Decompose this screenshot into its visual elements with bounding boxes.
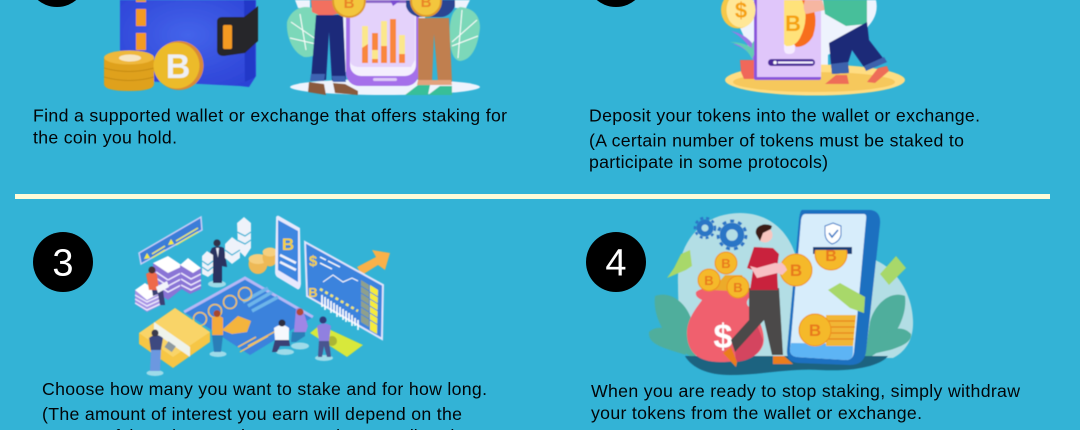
text: step 2 description xyxy=(589,106,980,172)
icon: person withdrawing coins from phone: B xyxy=(790,261,802,280)
number badge 1 xyxy=(27,0,87,7)
icon: isometric crypto data scene: $ xyxy=(309,253,318,270)
text: step 2 description: Deposit your tokens into the wallet or exchange. xyxy=(589,106,980,126)
text: step 4 description: your tokens from the wallet or exchange. xyxy=(591,403,922,423)
text: step 3 description xyxy=(42,379,487,430)
number badge 3 xyxy=(33,232,93,292)
text: step 1 description: the coin you hold. xyxy=(33,128,177,148)
text: step 1 description: Find a supported wallet or exchange that offers staking for xyxy=(33,106,507,126)
number 3: 3 xyxy=(52,242,74,284)
icon: two people holding coins beside phone xyxy=(287,0,480,95)
icon: isometric crypto data scene xyxy=(135,216,390,376)
icon: wallet with coins: B xyxy=(166,48,190,86)
icon: person withdrawing coins from phone: B xyxy=(809,321,821,340)
text: step 3 description: Choose how many you want to stake and for how long. xyxy=(42,379,487,399)
icon: person withdrawing coins from phone: B xyxy=(733,280,743,295)
number badge 2 xyxy=(586,0,646,7)
panel: step 4 xyxy=(586,210,1020,423)
icon: isometric crypto data scene: B xyxy=(308,285,318,300)
text: step 4 description: When you are ready to stop staking, simply withdraw xyxy=(591,381,1020,401)
divider xyxy=(15,194,1050,199)
number 4: 4 xyxy=(605,242,627,284)
text: step 2 description: (A certain number of tokens must be staked to xyxy=(589,130,964,150)
text: step 4 description xyxy=(591,381,1020,423)
icon: person withdrawing coins from phone: $ xyxy=(714,318,733,356)
icon: person withdrawing coins from phone: B xyxy=(721,256,731,271)
icon: person withdrawing coins from phone: B xyxy=(704,273,714,288)
icon: person withdrawing coins from phone: B xyxy=(825,248,837,265)
text: step 1 description xyxy=(33,106,507,148)
icon: wallet with coins xyxy=(104,0,258,91)
icon: person depositing coin into phone: B xyxy=(785,11,801,36)
number badge 4 xyxy=(586,232,646,292)
icon: person withdrawing coins from phone xyxy=(649,210,913,375)
icon: person depositing coin into phone xyxy=(721,0,905,96)
panel: step 1 xyxy=(27,0,258,91)
text: step 2 description: participate in some protocols) xyxy=(589,152,828,172)
panel: step 2 xyxy=(586,0,980,172)
panel: step 3 xyxy=(33,216,487,430)
text: step 3 description: (The amount of interest you earn will depend on the xyxy=(42,404,462,424)
icon: isometric crypto data scene: B xyxy=(282,235,294,254)
